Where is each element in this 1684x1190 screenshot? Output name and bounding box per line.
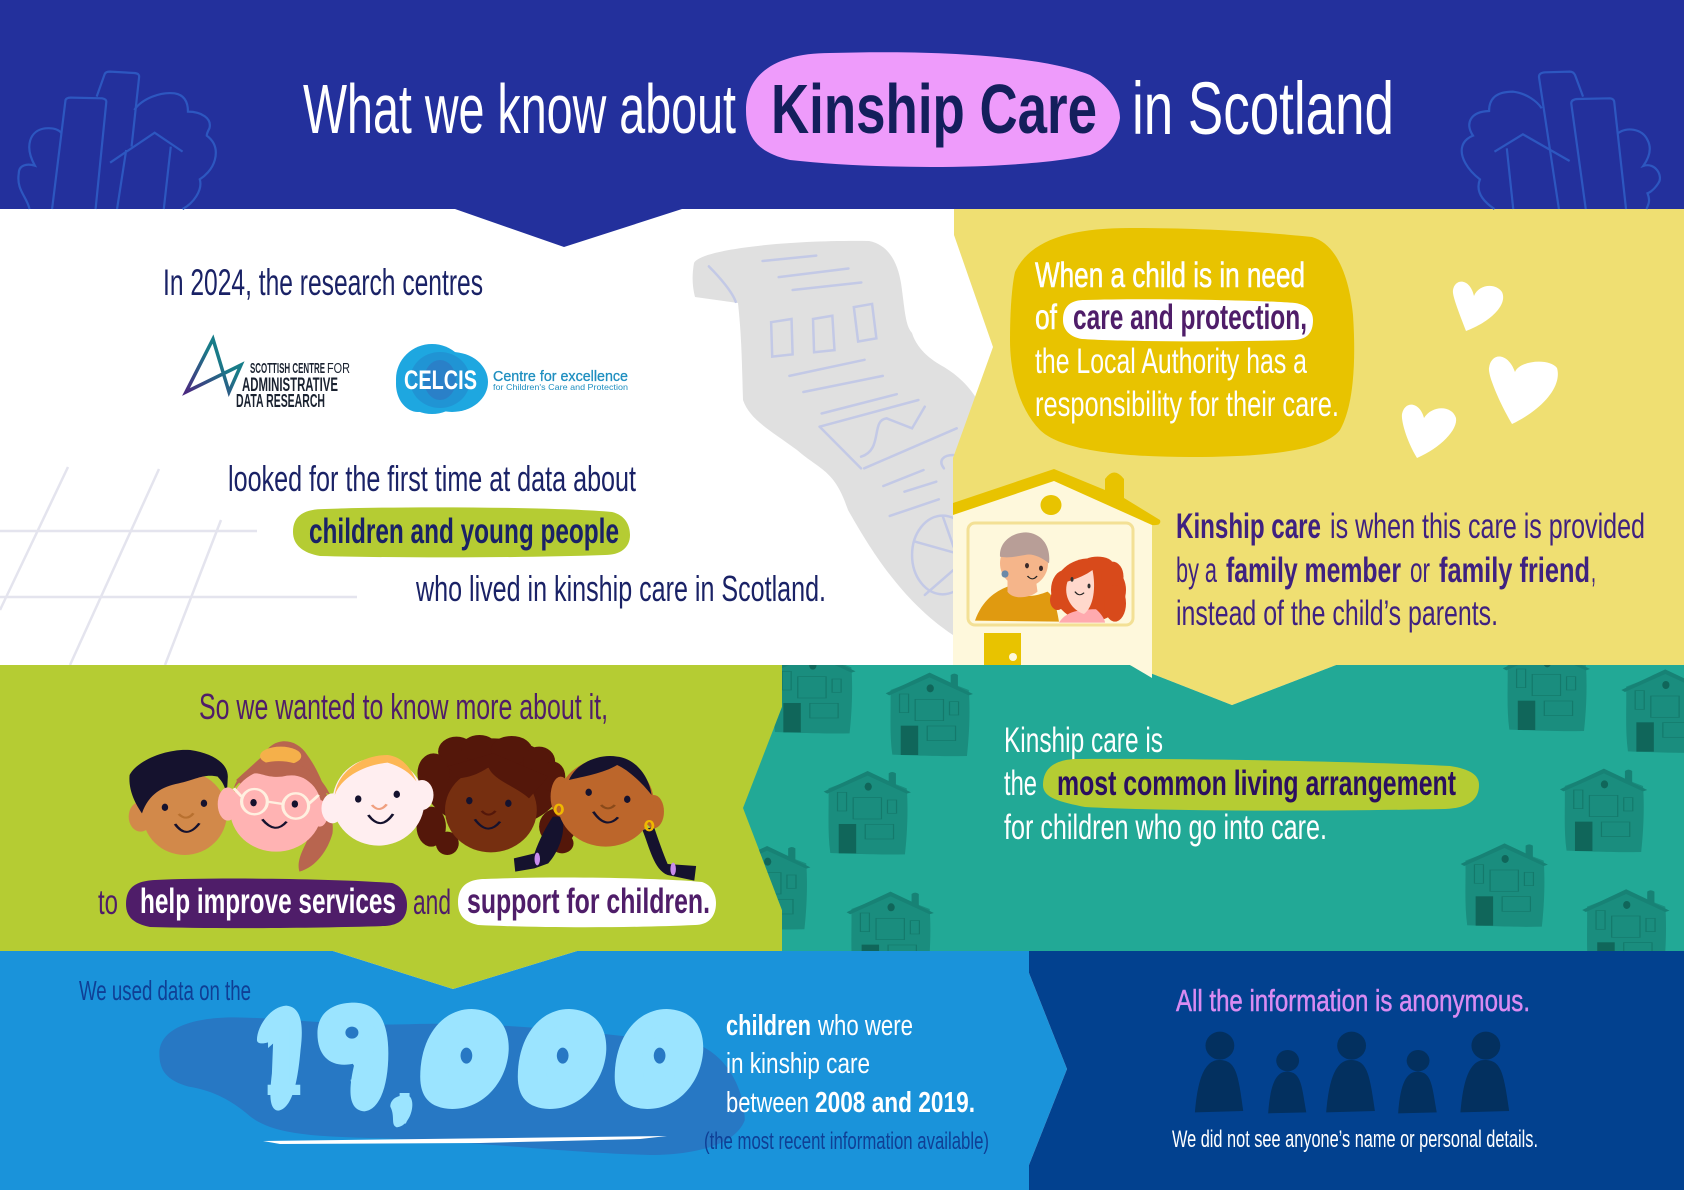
text: most common living arrangement: for children who go into care.	[1004, 808, 1327, 847]
title: in Scotland	[1132, 67, 1394, 150]
icon: city outline right	[1462, 72, 1660, 209]
panel: teal band with arrow	[743, 665, 1684, 951]
text: help improve services and support: and	[413, 883, 451, 922]
text: looked for the first time: children and young people	[309, 512, 619, 551]
title: What we know about	[303, 70, 736, 148]
callout: care and protection bubble: responsibility for their care.	[1035, 385, 1339, 424]
text: most common living arrangement: Kinship care is	[1004, 721, 1163, 760]
text: looked for the first time	[228, 458, 826, 609]
highlight pill: children and young people	[293, 507, 630, 557]
logo: Scottish Centre for Administrative Data Research: DATA RESEARCH	[236, 391, 325, 411]
text: most common living arrangement	[1004, 721, 1479, 847]
illustration: five children's faces	[129, 735, 696, 881]
callout: care and protection bubble: the Local Authority has a	[1035, 342, 1307, 381]
illustration: paper scroll	[693, 241, 1000, 660]
text: looked for the first time: who lived in kinship care in Scotland.	[415, 568, 826, 609]
callout: care and protection bubble: of	[1035, 298, 1057, 337]
panel: blue data band	[0, 951, 1067, 1190]
logo: CELCIS: CELCIS	[404, 365, 477, 395]
text: children who were in kinship care: between	[726, 1087, 809, 1119]
highlight pill: most common living arrangement	[1043, 759, 1479, 811]
callout: care and protection bubble	[1010, 228, 1354, 457]
text: help improve services and support: help improve services	[140, 882, 396, 921]
logo: CELCIS: for Children's Care and Protection	[493, 382, 628, 392]
text: kinship care definition: instead of the child’s parents.	[1176, 594, 1498, 633]
underline stroke	[263, 1136, 667, 1144]
heading: all the information is anonymous: All the information is anonymous.	[1176, 983, 1530, 1018]
panel: dark blue anonymity band	[1029, 951, 1684, 1190]
logo: Scottish Centre for Administrative Data Research: SCOTTISH CENTRE	[250, 360, 325, 377]
face: fair-haired child	[321, 755, 434, 846]
highlight pill: support for children	[458, 878, 716, 927]
callout: care and protection bubble: care and protection,	[1073, 298, 1307, 337]
text: most recent information note: (the most recent information available)	[704, 1128, 989, 1155]
title highlight pill	[746, 52, 1120, 167]
text: so we wanted to know more: So we wanted to know more about it,	[199, 686, 608, 727]
text: children who were in kinship care	[726, 1010, 975, 1119]
illustration: yellow-roof house with grandmother and child	[953, 469, 1160, 665]
text: help improve services and support	[98, 878, 716, 928]
text: most common living arrangement: the	[1004, 764, 1037, 803]
icon: five anonymous people	[1195, 1032, 1509, 1113]
face: boy	[129, 750, 228, 855]
title	[303, 52, 1394, 167]
logo: Scottish Centre for Administrative Data Research: ADMINISTRATIVE	[242, 375, 338, 396]
highlight pill: help improve services	[126, 879, 407, 928]
text: children who were in kinship care: who were	[817, 1010, 913, 1042]
text: kinship care definition: family friend	[1439, 551, 1590, 590]
text: kinship care definition: Kinship care	[1176, 507, 1321, 546]
face: curly-haired child	[417, 735, 576, 855]
text: most common living arrangement: most common living arrangement	[1057, 764, 1456, 803]
logo: CELCIS: Centre for excellence	[493, 368, 628, 385]
blob behind number	[159, 1017, 745, 1155]
text: kinship care definition	[1176, 507, 1645, 633]
yellow pointer over teal	[1130, 665, 1336, 705]
panel: white intro background	[0, 209, 1684, 665]
panel: lime band	[0, 665, 782, 951]
house base patch over pointer	[1130, 665, 1152, 678]
callout: care and protection bubble: When a child is in need	[1035, 256, 1305, 295]
text: kinship care definition: family member	[1226, 551, 1401, 590]
panel: yellow kinship definition	[953, 209, 1684, 705]
text: we used data on the: We used data on the	[79, 975, 251, 1006]
text: research centres intro: In 2024, the research centres	[163, 262, 483, 303]
logo: Scottish Centre for Administrative Data Research	[186, 339, 350, 411]
face: child with braids	[514, 756, 696, 881]
text: help improve services and support: to	[98, 883, 118, 922]
text: help improve services and support: support for children.	[467, 882, 710, 921]
text: kinship care definition: or	[1410, 551, 1430, 590]
pattern: teal houses	[723, 648, 1684, 975]
title: Kinship Care	[771, 70, 1097, 148]
logo: CELCIS	[396, 344, 628, 414]
text: children who were in kinship care: children	[726, 1010, 811, 1042]
icons: white hearts	[1402, 282, 1558, 458]
text: children who were in kinship care: in kinship care	[726, 1048, 870, 1080]
panel: header band	[0, 0, 1684, 247]
big number 19,000: 19,000	[263, 1006, 679, 1130]
logo: Scottish Centre for Administrative Data Research: FOR	[327, 360, 350, 377]
text: kinship care definition: by a	[1176, 551, 1217, 590]
decorative sketched grid	[0, 467, 357, 665]
icon: city outline left	[18, 72, 216, 209]
lime pointer	[333, 951, 577, 989]
highlight pill: care and protection	[1063, 299, 1313, 341]
face: girl with glasses	[218, 741, 333, 872]
text: children who were in kinship care: 2008 and 2019.	[815, 1087, 975, 1119]
text: looked for the first time: looked for the first time at data about	[228, 458, 636, 499]
text: kinship care definition: ,	[1591, 551, 1596, 590]
